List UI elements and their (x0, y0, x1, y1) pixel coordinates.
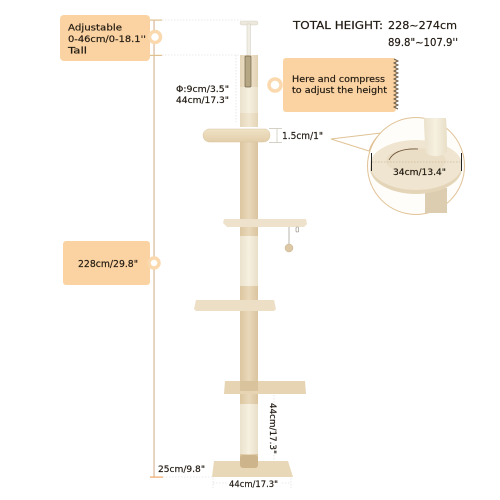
cat tree (194, 21, 307, 477)
base (212, 461, 293, 477)
total height line (145, 20, 163, 478)
dotted guide lines (162, 20, 291, 488)
pole sections (240, 142, 258, 220)
total height text (292, 19, 458, 49)
dimension: pole: Φ:9cm/3.5" (176, 85, 229, 95)
platform 3 (194, 300, 276, 311)
platform 4 (224, 381, 306, 394)
tag: compress instruction (269, 58, 398, 112)
dimension: cushion thickness (269, 128, 323, 142)
callout: perch detail (331, 118, 464, 214)
total height text: 89.8"~107.9'' (388, 36, 458, 49)
tag: adjustable height: Tall (67, 46, 87, 56)
dimension: pole: 44cm/17.3" (176, 96, 229, 106)
tag: 228cm (63, 241, 159, 285)
tag: adjustable height: Adjustable (68, 22, 122, 34)
top pole with spring (240, 55, 258, 127)
total height text: TOTAL HEIGHT: (292, 19, 383, 32)
total height text: 228~274cm (388, 19, 457, 32)
tag: 228cm: 228cm/29.8" (78, 259, 138, 270)
dimension: base width: 44cm/17.3" (229, 480, 278, 490)
dimension: cushion thickness: 1.5cm/1" (282, 131, 323, 142)
tag: adjustable height (60, 15, 160, 61)
hanging ball toy (285, 227, 298, 252)
dimension: vertical 44cm: 44cm/17.3" (267, 403, 277, 454)
ceiling cap and rod (240, 21, 258, 56)
callout: perch detail: 34cm/13.4" (393, 168, 446, 178)
tag: compress instruction: to adjust the height (292, 86, 387, 96)
platform 1 (203, 129, 270, 142)
tag: adjustable height: 0-46cm/0-18.1'' (68, 34, 146, 45)
dimension: base height: 25cm/9.8" (158, 464, 205, 475)
dimension: pole (176, 85, 229, 106)
tag: compress instruction: Here and compress (292, 75, 385, 85)
platform 2 (223, 219, 307, 227)
